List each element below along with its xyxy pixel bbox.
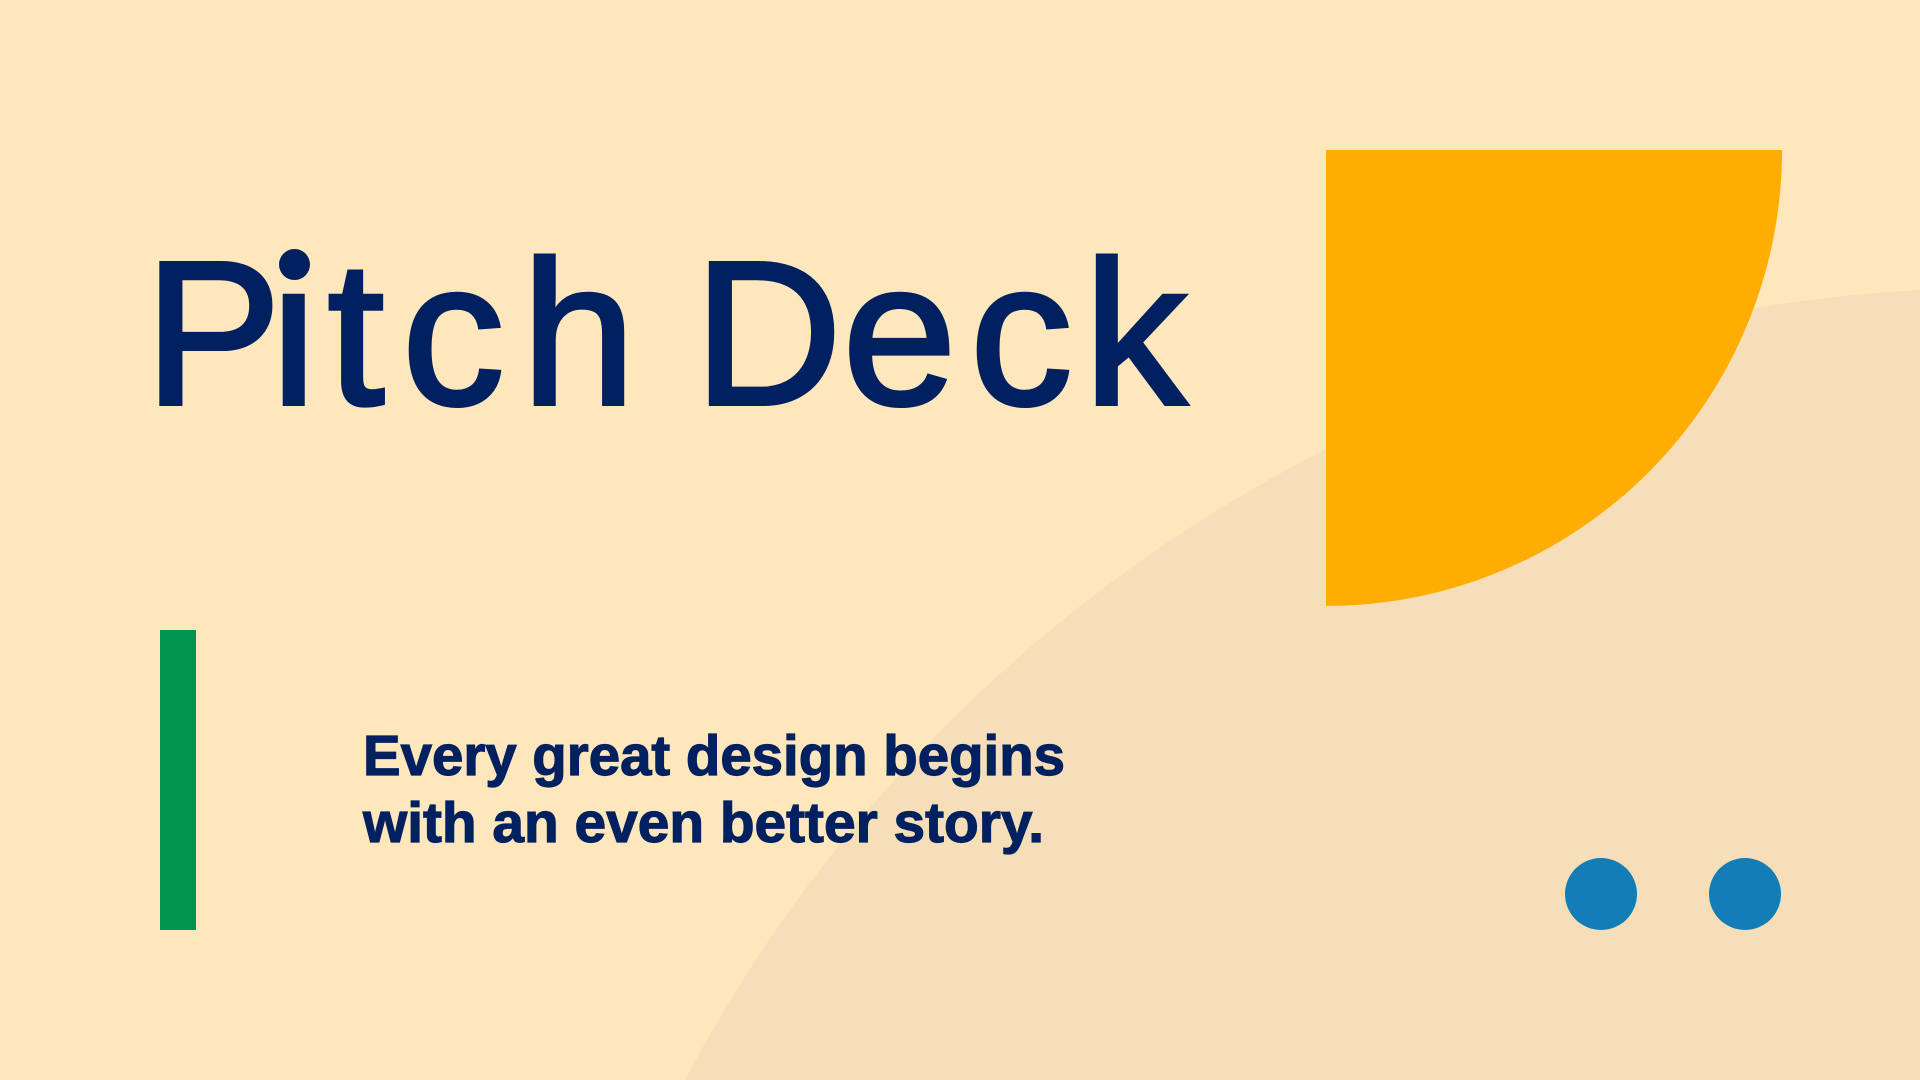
green vertical bar <box>160 630 196 930</box>
title: Pitch Deck <box>144 219 1187 448</box>
title i-dot <box>279 248 313 288</box>
subtitle line 1: Every great design begins <box>363 724 1065 788</box>
background large curved shape <box>685 290 1920 1080</box>
subtitle line 2: with an even better story. <box>362 791 1044 855</box>
left dot <box>1565 858 1637 930</box>
right dot <box>1709 858 1781 930</box>
two blue dots <box>1565 858 1781 930</box>
subtitle text block <box>362 724 1065 855</box>
orange quarter-circle shape <box>1326 150 1782 606</box>
